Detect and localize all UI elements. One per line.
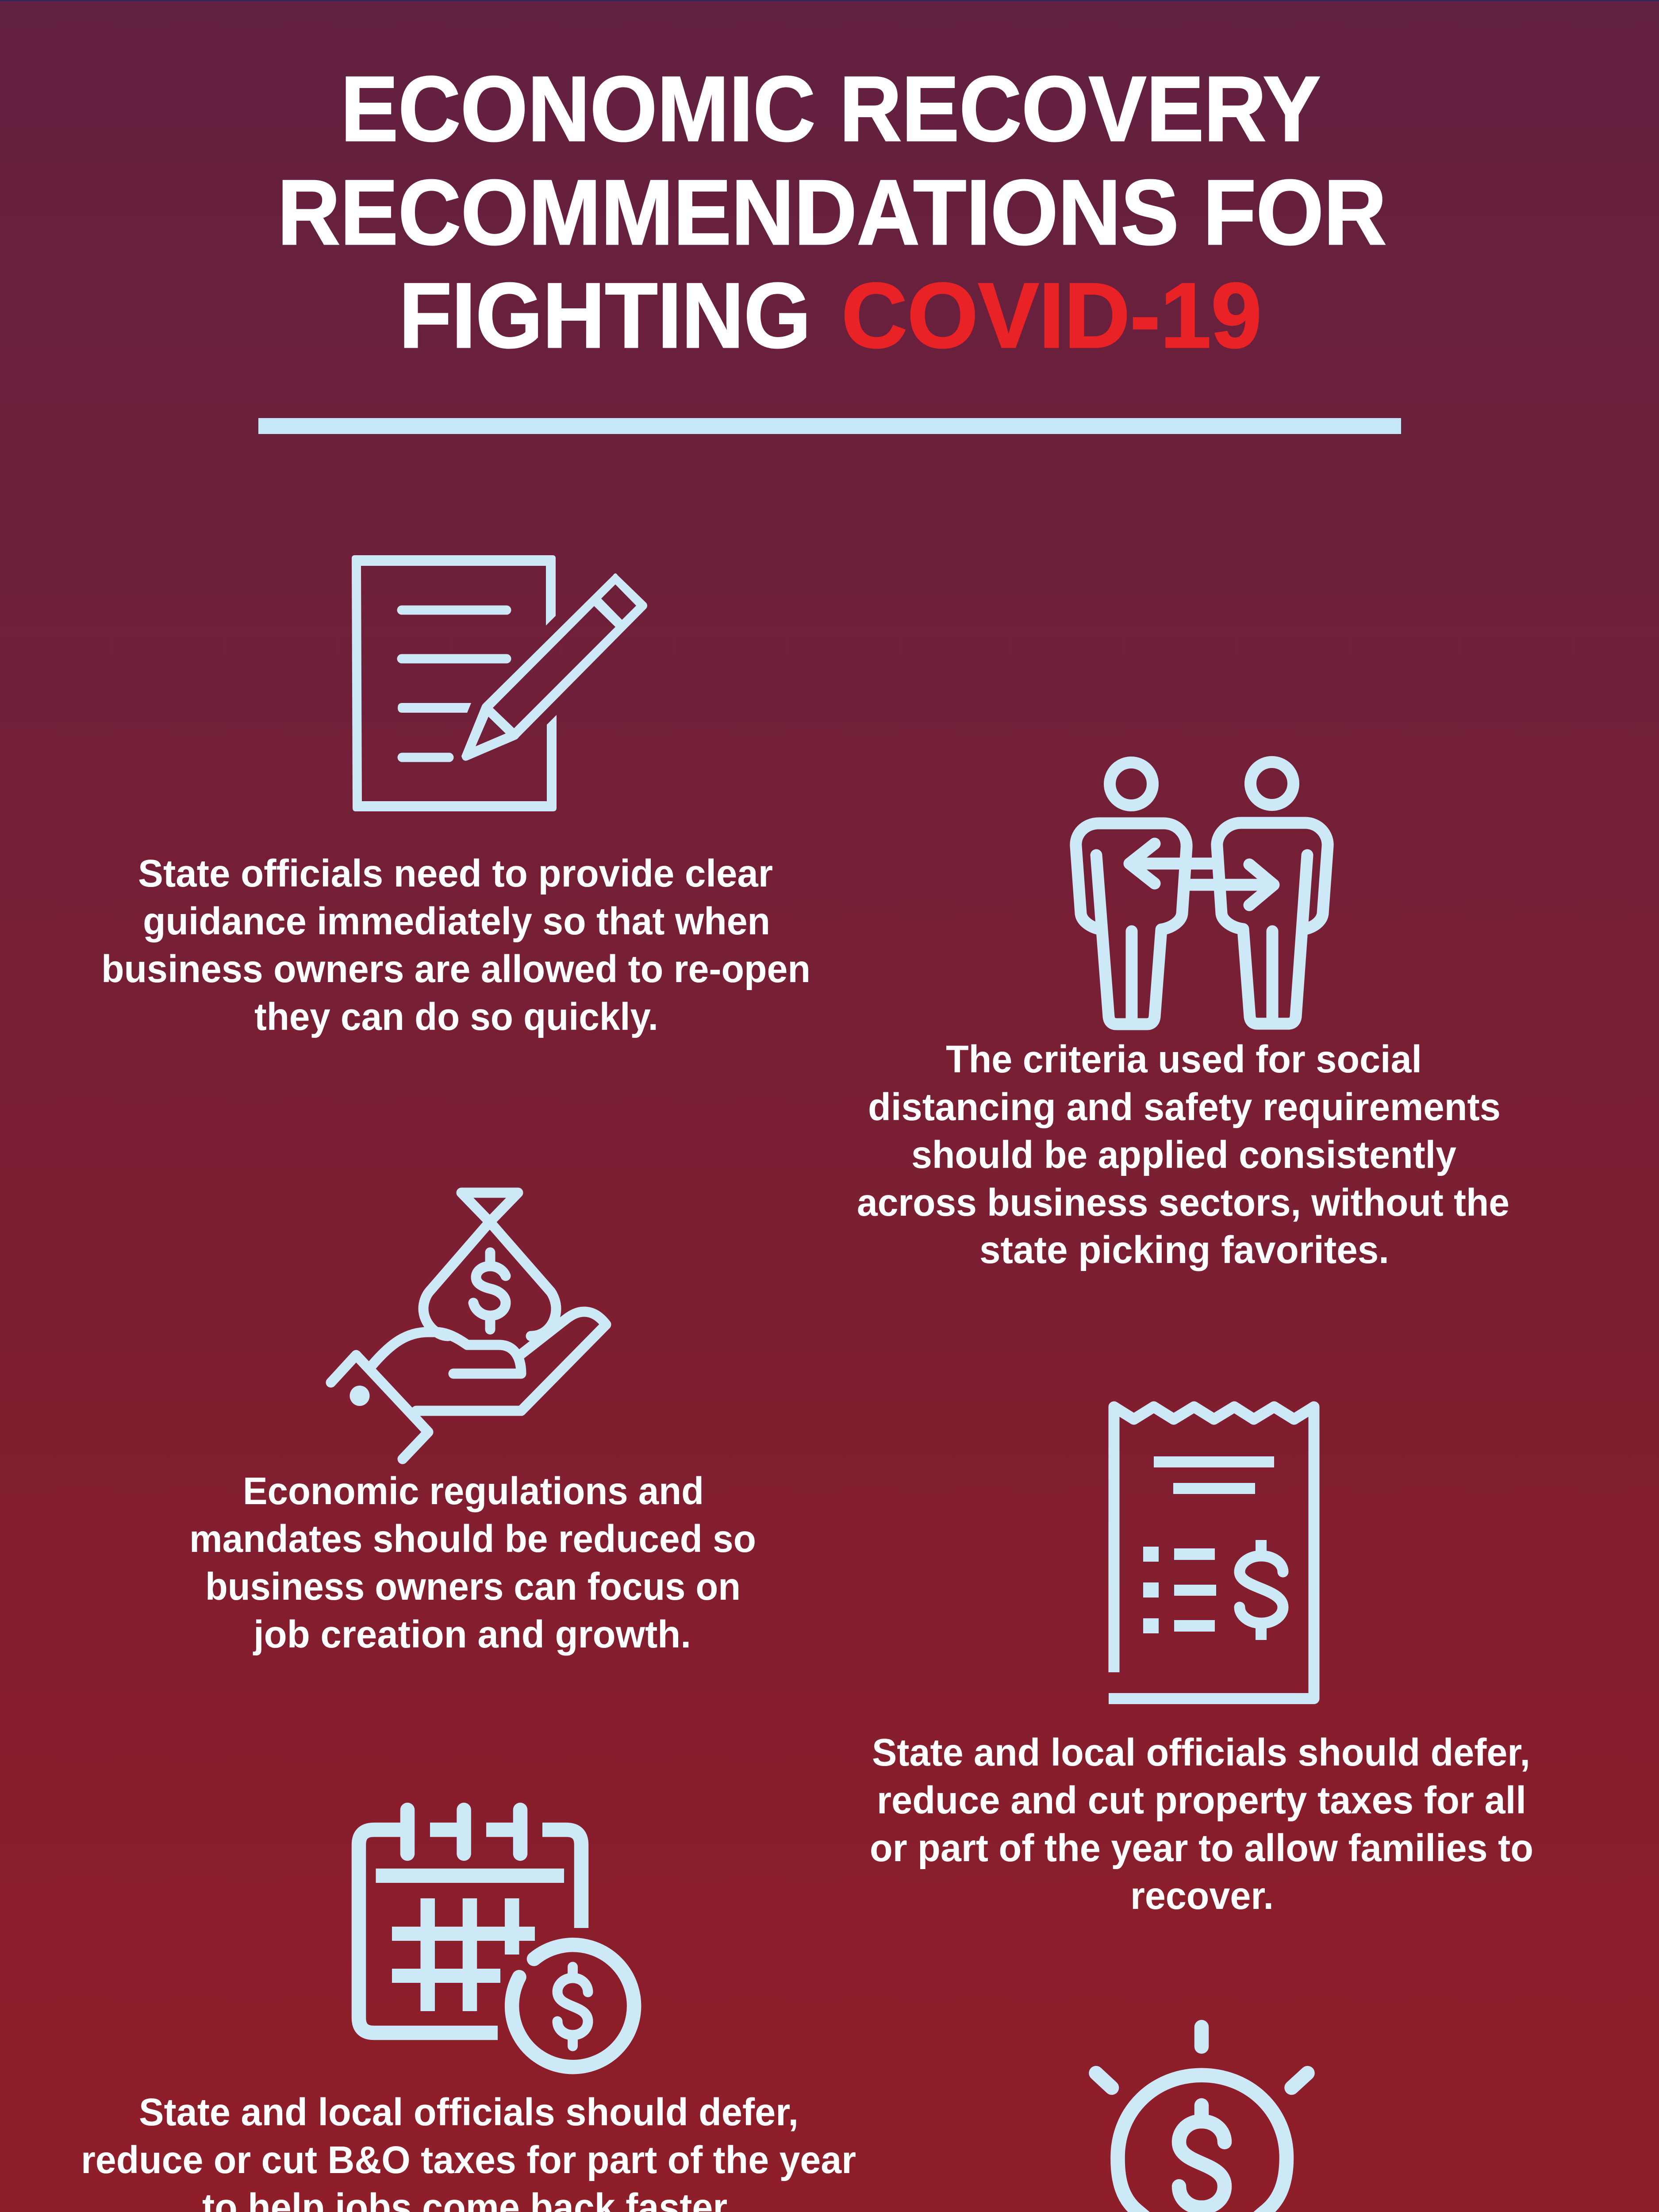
text: property taxes: State and local officials should defer, [872, 1731, 1530, 1774]
panel: economic regulations [189, 1193, 756, 1656]
text: social distancing criteria: distancing and safety requirements [868, 1086, 1501, 1129]
text: economic regulations: job creation and growth. [253, 1613, 691, 1656]
text: social distancing criteria [857, 1038, 1509, 1271]
panel: tax relief [866, 2027, 1506, 2212]
text: clear guidance [101, 852, 810, 1038]
icon: receipt with dollar sign [1109, 1407, 1314, 1699]
title [277, 58, 1386, 367]
text: social distancing criteria: The criteria used for social [946, 1038, 1422, 1081]
text: clear guidance: State officials need to provide clear [138, 852, 773, 895]
text: property taxes [870, 1731, 1533, 1917]
text: property taxes: recover. [1130, 1874, 1274, 1917]
title: ECONOMIC RECOVERY [341, 58, 1321, 161]
text: economic regulations: business owners can focus on [205, 1565, 741, 1608]
icon: two people with arrows [1076, 762, 1328, 1024]
icon: hand holding money bag [331, 1193, 606, 1459]
text: clear guidance: guidance immediately so that when [143, 900, 770, 943]
icon: light bulb with dollar sign [1096, 2027, 1308, 2212]
title underline rule [258, 418, 1401, 434]
panel: B&O taxes [81, 1810, 856, 2212]
text: economic regulations: mandates should be reduced so [189, 1517, 756, 1560]
text: property taxes: or part of the year to allow families to [870, 1827, 1533, 1870]
panel: property taxes [870, 1407, 1533, 1917]
panel: clear guidance [101, 555, 810, 1038]
text: property taxes: reduce and cut property taxes for all [877, 1779, 1526, 1822]
icon: calendar with coin [359, 1810, 634, 2067]
panel: social distancing criteria [857, 762, 1509, 1271]
title: RECOMMENDATIONS FOR [277, 161, 1386, 264]
text: economic regulations [189, 1470, 756, 1656]
text: B&O taxes: State and local officials should defer, [139, 2091, 799, 2134]
icon: document and pencil [352, 555, 647, 811]
text: social distancing criteria: across business sectors, without the [857, 1181, 1509, 1224]
text: B&O taxes: reduce or cut B&O taxes for part of the year [81, 2139, 856, 2181]
title: FIGHTING [399, 264, 811, 367]
text: B&O taxes [81, 2091, 856, 2212]
text: clear guidance: business owners are allowed to re-open [101, 948, 810, 991]
text: clear guidance: they can do so quickly. [254, 995, 658, 1038]
text: social distancing criteria: state picking favorites. [979, 1229, 1389, 1271]
title: COVID-19 [841, 264, 1262, 367]
text: economic regulations: Economic regulations and [243, 1470, 704, 1513]
text: social distancing criteria: should be applied consistently [911, 1133, 1456, 1176]
